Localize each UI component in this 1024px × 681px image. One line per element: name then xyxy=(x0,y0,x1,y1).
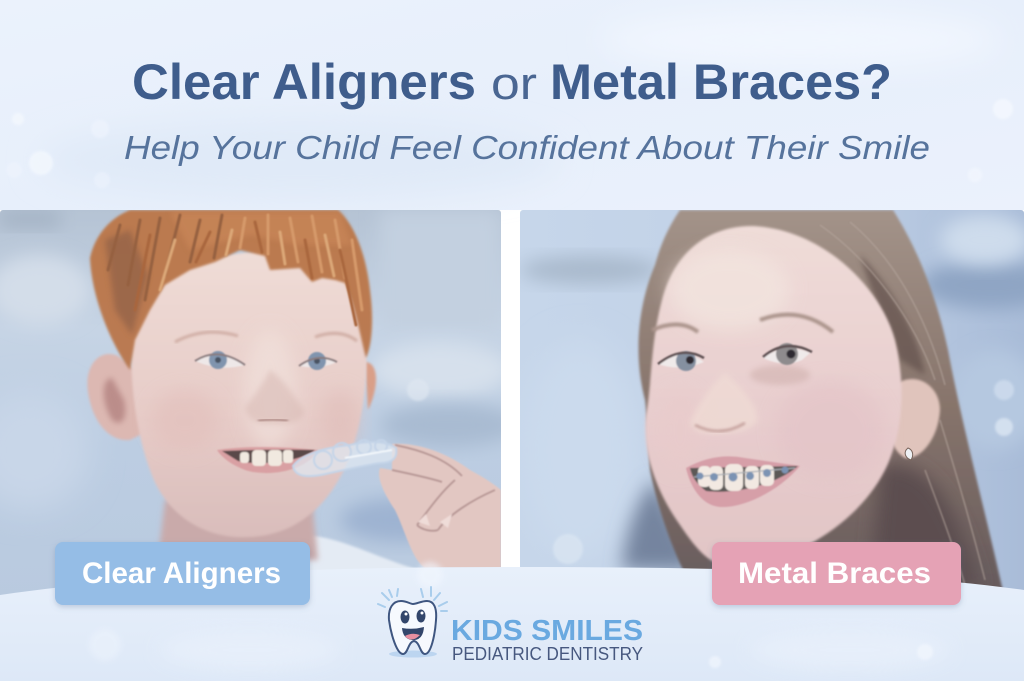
girl face xyxy=(645,226,902,567)
girl eyes xyxy=(658,343,812,371)
footer arc xyxy=(0,562,1024,681)
title xyxy=(132,54,892,110)
logo wordmark: PEDIATRIC DENTISTRY xyxy=(452,644,643,664)
panel: girl photo with metal braces xyxy=(520,210,1024,605)
shadow behind shoulder xyxy=(622,480,700,570)
logo xyxy=(378,587,643,664)
header background xyxy=(0,0,1024,210)
logo wordmark: KIDS SMILES xyxy=(451,615,643,647)
girl smile with braces xyxy=(686,456,800,507)
boy smile xyxy=(217,447,318,473)
clear aligner tray xyxy=(293,440,396,476)
panel: boy photo with clear aligners xyxy=(0,210,520,605)
title: or xyxy=(491,58,537,109)
boy eyes xyxy=(195,351,337,370)
title: Clear Aligners xyxy=(132,54,476,110)
girl figure xyxy=(622,210,1005,600)
earring xyxy=(905,448,913,460)
girl ear xyxy=(888,379,940,458)
label: metal braces: Metal Braces xyxy=(738,557,931,590)
boy figure xyxy=(87,210,501,575)
girl hair xyxy=(638,210,1005,600)
icon: smiling tooth xyxy=(378,587,447,658)
boy hair xyxy=(90,210,372,370)
label: metal braces xyxy=(712,542,961,605)
label: clear aligners xyxy=(55,542,310,605)
subtitle: Help Your Child Feel Confident About Their Smile xyxy=(124,129,930,166)
label: clear aligners: Clear Aligners xyxy=(82,557,281,590)
title: Metal Braces? xyxy=(550,54,892,110)
hand xyxy=(379,444,501,568)
logo wordmark xyxy=(451,615,643,664)
